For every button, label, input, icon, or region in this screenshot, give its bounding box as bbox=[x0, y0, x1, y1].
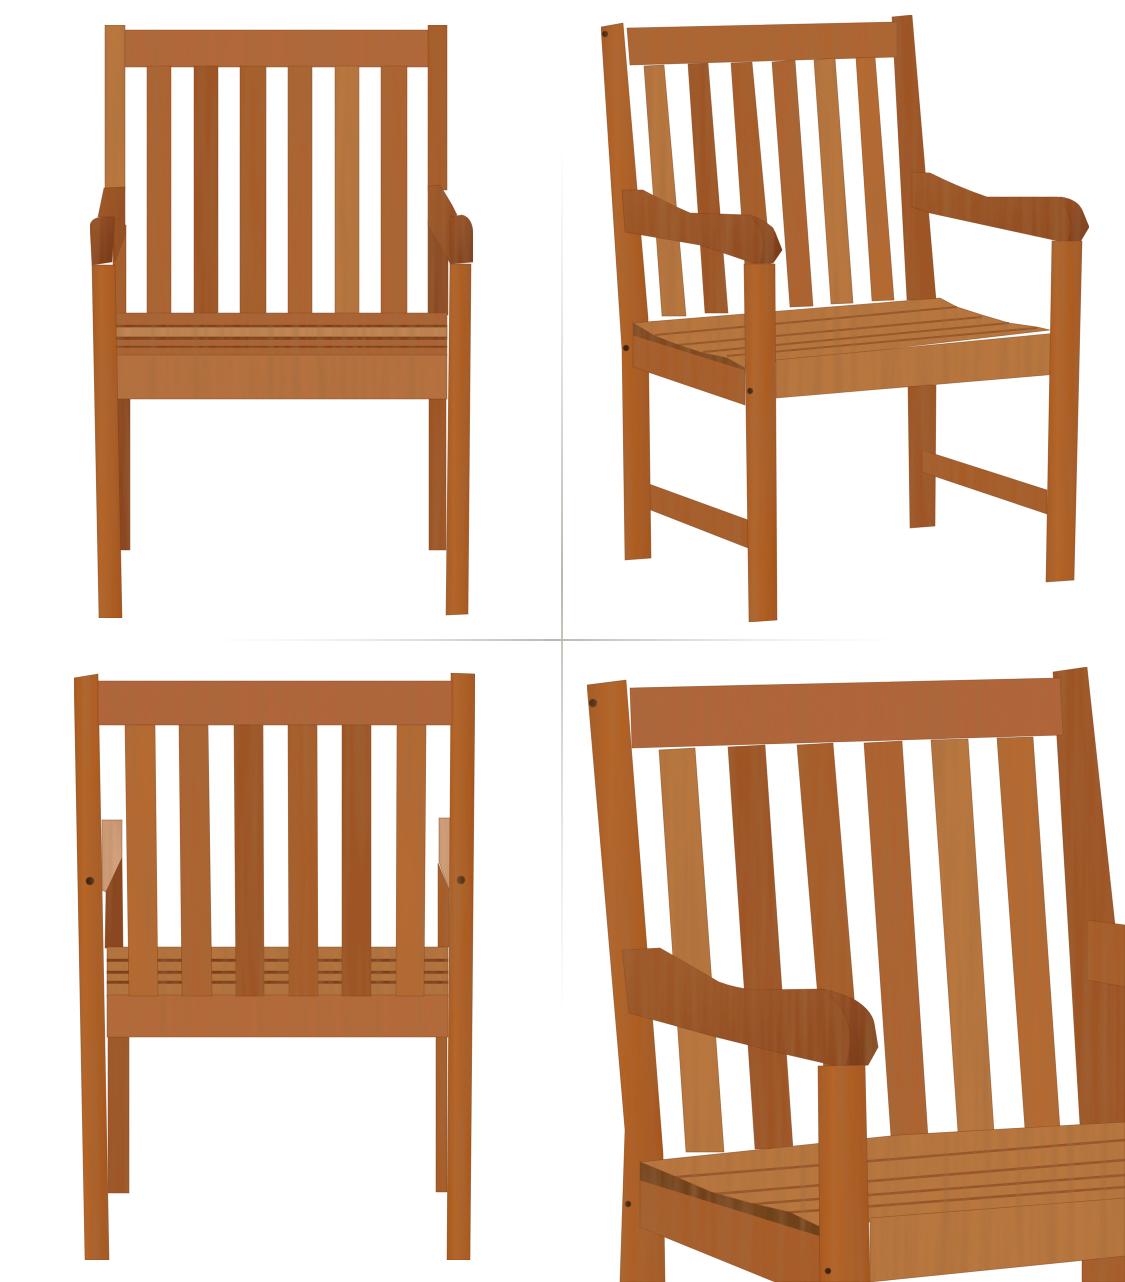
rear legs bbox=[108, 1037, 447, 1193]
backrest slats bbox=[659, 737, 1060, 1152]
far post, arm and leg bbox=[1053, 667, 1125, 1282]
chair: close-up view bbox=[587, 667, 1125, 1282]
armrests bbox=[90, 185, 473, 265]
far rear leg and stretchers bbox=[638, 385, 1047, 548]
top rail bbox=[125, 30, 428, 67]
far armrest bbox=[912, 172, 1089, 242]
chair: front view bbox=[90, 25, 473, 618]
back legs bbox=[117, 399, 446, 550]
near armrest nose bbox=[750, 215, 782, 263]
top rail bbox=[630, 678, 1063, 748]
top rail bbox=[627, 22, 897, 65]
side arms bbox=[102, 818, 450, 948]
armrest nose bbox=[823, 989, 878, 1067]
bolts bbox=[589, 699, 831, 1274]
bolts bbox=[602, 31, 753, 394]
armrest bbox=[622, 948, 878, 1067]
far armrest nose bbox=[1060, 197, 1089, 242]
backrest slats bbox=[147, 66, 407, 314]
backrest slats bbox=[125, 725, 426, 996]
near back post bbox=[587, 680, 665, 1282]
front legs bbox=[92, 264, 471, 618]
seat bbox=[107, 947, 448, 1037]
near front leg bbox=[744, 264, 777, 622]
seat bbox=[633, 298, 1058, 405]
back posts bbox=[105, 25, 448, 315]
back posts and legs bbox=[74, 673, 475, 1260]
top rail bbox=[98, 681, 452, 725]
chair: three-quarter view bbox=[601, 15, 1089, 622]
back posts bbox=[601, 15, 936, 560]
backrest slats bbox=[644, 57, 894, 316]
near armrest bbox=[622, 190, 782, 263]
far front leg bbox=[1046, 241, 1082, 582]
seat bbox=[116, 313, 447, 399]
chair: back view bbox=[74, 673, 475, 1260]
bolts bbox=[86, 876, 465, 885]
front leg bbox=[818, 1065, 870, 1282]
seat bbox=[640, 1122, 1125, 1282]
